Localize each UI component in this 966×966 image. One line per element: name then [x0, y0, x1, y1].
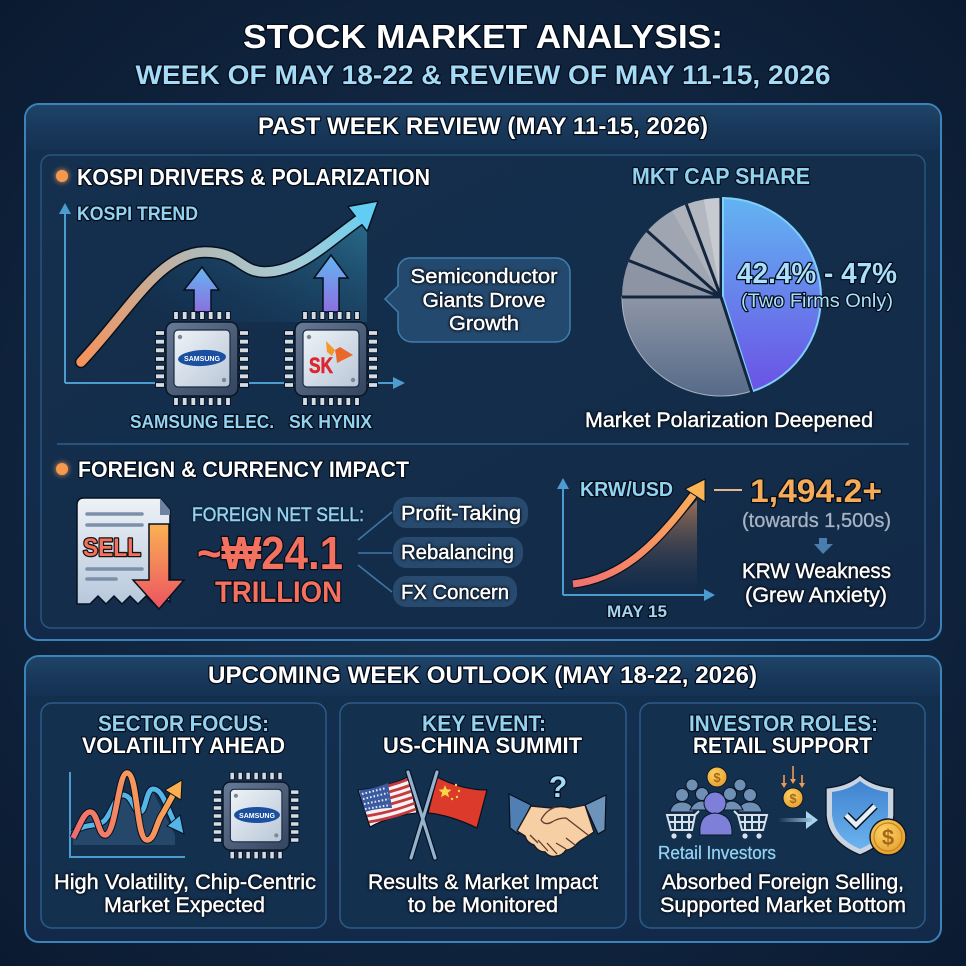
pill: profit-taking: Profit-Taking [401, 503, 521, 525]
icon: sk chip: SK [309, 353, 333, 378]
axis label: KOSPI TREND [77, 204, 198, 225]
label: retail investors: Retail Investors [658, 843, 776, 863]
pill: fx concern: FX Concern [401, 582, 509, 604]
heading: past week review [26, 105, 940, 150]
slice: others large [622, 297, 752, 396]
card text: Market Expected [104, 894, 265, 917]
chart axes [65, 210, 395, 383]
card text: High Volatility, Chip-Centric [54, 871, 316, 894]
card heading: RETAIL SUPPORT [693, 733, 873, 758]
card text: to be Monitored [408, 894, 558, 917]
pill: profit-taking [393, 497, 528, 528]
card: investor roles [640, 703, 925, 928]
heading: mkt cap share: MKT CAP SHARE [632, 163, 810, 189]
text: krw weakness: KRW Weakness [742, 560, 891, 583]
chart: kospi trend [59, 202, 405, 432]
card text: Supported Market Bottom [660, 894, 906, 917]
text: towards 1500s: (towards 1,500s) [742, 510, 891, 532]
number: 24.1 trillion [197, 527, 343, 609]
card heading [82, 711, 285, 758]
panel: past week review [25, 104, 941, 640]
icon: sell receipt [77, 498, 184, 609]
icon: retail investors [658, 767, 776, 863]
text: krw weakness [742, 560, 891, 607]
icon: handshake [509, 771, 606, 856]
title: STOCK MARKET ANALYSIS: [243, 18, 723, 55]
panel: kospi and currency inner [41, 155, 925, 628]
hands [517, 805, 594, 856]
heading: upcoming week [26, 657, 940, 696]
pill: rebalancing: Rebalancing [401, 542, 514, 564]
arrow: small down [814, 538, 833, 554]
callout: semiconductor giants [385, 258, 570, 342]
connectors [358, 512, 392, 592]
chart: krw/usd: KRW/USD [580, 479, 673, 501]
callout: semiconductor giants: Giants Drove [422, 289, 546, 312]
title: WEEK OF MAY 18-22 & REVIEW OF MAY 11-15, 2026 [136, 60, 830, 90]
coin: $ [713, 770, 721, 785]
text: market polarization: Market Polarization Deepened [585, 409, 873, 432]
number: 24.1 trillion: TRILLION [215, 576, 342, 609]
chart: krw/usd [557, 478, 715, 621]
card heading: SECTOR FOCUS: [98, 711, 269, 736]
arrow: samsung up [184, 267, 219, 312]
card text [54, 871, 316, 917]
card text: Absorbed Foreign Selling, [662, 871, 904, 894]
pie label: two firms: (Two Firms Only) [741, 290, 893, 312]
text: krw weakness: (Grew Anxiety) [745, 584, 887, 607]
heading: upcoming week: UPCOMING WEEK OUTLOOK (MAY 18-22, 2026) [208, 662, 757, 689]
card text [660, 871, 906, 917]
callout: semiconductor giants: Growth [449, 312, 519, 335]
dash [714, 489, 742, 491]
text: foreign net sell: FOREIGN NET SELL: [192, 505, 364, 526]
pill: rebalancing [393, 537, 523, 568]
card heading: US-CHINA SUMMIT [383, 733, 583, 758]
card heading [383, 711, 583, 758]
card text [368, 871, 598, 917]
icon: flags [358, 772, 487, 858]
arrow: to shield [778, 811, 818, 829]
callout: semiconductor giants: Semiconductor [410, 265, 558, 288]
pie label: share: 42.4% - 47% [737, 258, 897, 290]
icon: samsung chip [213, 772, 299, 859]
number: 1494.2: 1,494.2+ [750, 473, 882, 509]
card: key event [340, 703, 626, 928]
slice: small 4 [686, 198, 721, 297]
card: sector focus [41, 703, 326, 928]
chart: krw/usd: MAY 15 [607, 602, 667, 621]
chart area [150, 215, 367, 322]
icon: samsung chip: SAMSUNG [239, 811, 275, 820]
label: samsung elec: SAMSUNG ELEC. [130, 412, 274, 432]
card text: Results & Market Impact [368, 871, 598, 894]
trend line [81, 202, 377, 362]
icon: shield [826, 775, 906, 855]
panel: upcoming week outlook [25, 656, 941, 942]
icon: samsung chip [155, 311, 249, 406]
label: sk hynix: SK HYNIX [289, 412, 372, 432]
icon: samsung chip: SAMSUNG [184, 354, 220, 363]
slice: small 1 [622, 261, 721, 297]
china flag [428, 777, 487, 828]
icon: sell receipt: SELL [83, 534, 141, 562]
cuffs [509, 794, 531, 834]
card heading: VOLATILITY AHEAD [82, 733, 285, 758]
question mark: ? [549, 771, 567, 804]
us flag [358, 777, 417, 827]
card heading: INVESTOR ROLES: [689, 711, 878, 736]
chart: volatility [70, 772, 185, 857]
card heading [689, 711, 878, 758]
slice: small 2 [629, 231, 721, 297]
axis arrowheads [59, 203, 405, 389]
slice dividers [622, 197, 721, 297]
title [136, 18, 830, 90]
divider [57, 443, 909, 445]
slice: two firms [723, 198, 821, 391]
heading: foreign and currency: FOREIGN & CURRENCY IMPACT [78, 457, 409, 482]
coin: $ [882, 825, 894, 850]
arrow: sk up [314, 255, 348, 312]
card heading: KEY EVENT: [422, 711, 546, 736]
icon: sk chip [284, 311, 378, 406]
heading: past week review: PAST WEEK REVIEW (MAY 11-15, 2026) [258, 113, 708, 140]
pill: fx concern [393, 576, 517, 607]
icon: falling coin [781, 766, 805, 808]
icon: falling coin: $ [789, 791, 797, 806]
slice: small 3 [647, 204, 721, 297]
poles [408, 772, 437, 858]
number: 24.1 trillion: ~₩24.1 [197, 527, 343, 579]
chart: market cap pie [622, 197, 897, 396]
heading: kospi drivers: KOSPI DRIVERS & POLARIZATION [77, 164, 430, 190]
